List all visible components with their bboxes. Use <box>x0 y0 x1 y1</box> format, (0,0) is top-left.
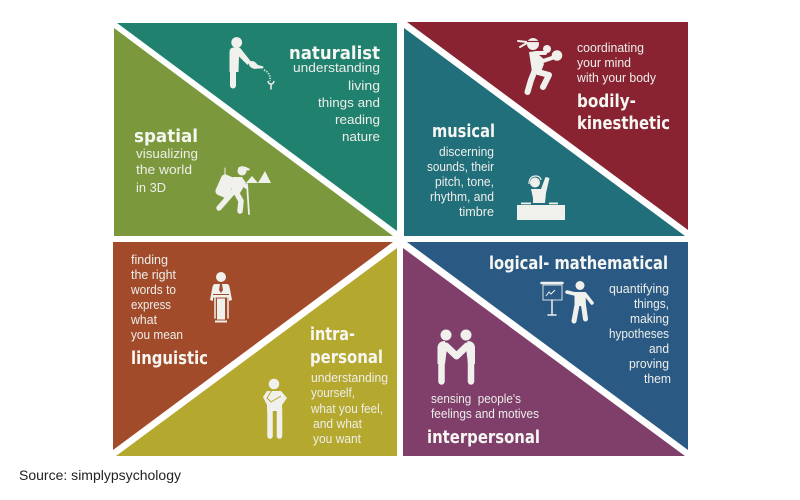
heading: linguistic: linguistic <box>131 349 208 369</box>
text: spatial description: visualizing <box>136 146 198 161</box>
text: naturalist description <box>293 60 380 144</box>
heading: logical-mathematical: logical- mathematical <box>489 254 668 274</box>
panel: bodily-kinesthetic <box>407 22 688 230</box>
text: intrapersonal description: understanding <box>311 370 388 385</box>
heading: bodily-kinesthetic: bodily- <box>577 92 636 112</box>
icon: speaker at podium <box>210 272 232 322</box>
text: linguistic description: express <box>131 297 171 312</box>
text: logical-mathematical description: proving <box>629 356 669 371</box>
heading: musical: musical <box>432 122 495 142</box>
panel: spatial <box>114 28 393 236</box>
text: interpersonal description <box>431 391 539 421</box>
heading: bodily-kinesthetic: kinesthetic <box>577 114 670 134</box>
text: musical description: timbre <box>459 204 494 219</box>
icon: two people shaking hands <box>438 330 475 382</box>
panel: linguistic <box>113 242 393 450</box>
text: linguistic description: finding <box>131 252 168 267</box>
text: logical-mathematical description: hypotheses <box>609 326 669 341</box>
text: linguistic description: words to <box>130 282 176 297</box>
source caption: Source: simplypsychology <box>19 467 181 483</box>
text: naturalist description: understanding <box>293 60 380 75</box>
icon: thinking person <box>263 379 287 436</box>
icon: DJ at turntable <box>517 176 565 220</box>
text: intrapersonal description: and what <box>313 416 362 431</box>
text: naturalist description: things and <box>318 95 380 110</box>
heading: intra-personal: personal <box>310 348 383 368</box>
text: naturalist description: living <box>348 78 380 93</box>
panel: logical-mathematical <box>407 242 688 450</box>
text: logical-mathematical description: making <box>630 311 669 326</box>
icon: hiker and mountains <box>214 166 271 214</box>
text: linguistic description: you mean <box>131 327 183 342</box>
text: logical-mathematical description: things, <box>634 296 669 311</box>
text: intrapersonal description <box>310 370 388 446</box>
text: linguistic description: the right <box>131 267 176 282</box>
text: logical-mathematical description: them <box>644 371 671 386</box>
text: bodily-kinesthetic description: coordinating <box>577 40 644 55</box>
text: intrapersonal description: what you feel, <box>310 401 383 416</box>
text: bodily-kinesthetic description <box>576 40 656 85</box>
text: naturalist description: nature <box>342 129 380 144</box>
text: musical description: sounds, their <box>427 159 495 174</box>
panel: interpersonal <box>403 248 685 456</box>
panel: intrapersonal <box>116 248 397 456</box>
heading: interpersonal: interpersonal <box>427 428 540 448</box>
text: intrapersonal description: you want <box>313 431 361 446</box>
text: logical-mathematical description: and <box>649 341 669 356</box>
text: interpersonal description: feelings and motives <box>431 406 539 421</box>
text: musical description <box>427 144 495 219</box>
icon: presenter at chart board <box>542 281 592 321</box>
panel: musical <box>404 28 685 236</box>
text: linguistic description: what <box>130 312 157 327</box>
icon: person watering plant <box>230 37 274 90</box>
text: linguistic description <box>130 252 183 342</box>
panel: naturalist <box>117 23 397 231</box>
text: bodily-kinesthetic description: with your body <box>576 70 656 85</box>
text: naturalist description: reading <box>335 112 380 127</box>
text: musical description: pitch, tone, <box>435 174 494 189</box>
text: musical description: discerning <box>439 144 494 159</box>
heading: naturalist: naturalist <box>289 44 380 64</box>
text: spatial description: the world <box>136 162 192 177</box>
text: musical description: rhythm, and <box>430 189 494 204</box>
text: logical-mathematical description: quantifying <box>609 281 669 296</box>
heading: bodily-kinesthetic <box>577 92 670 134</box>
heading: spatial: spatial <box>134 127 198 147</box>
heading: intra-personal: intra- <box>310 325 355 345</box>
text: intrapersonal description: yourself, <box>311 385 355 400</box>
text: logical-mathematical description <box>609 281 671 386</box>
text: interpersonal description: sensing people's <box>431 391 521 406</box>
icon: boxer <box>518 38 562 92</box>
text: bodily-kinesthetic description: your mind <box>577 55 631 70</box>
heading: intra-personal <box>310 325 383 368</box>
text: spatial description: in 3D <box>136 180 166 195</box>
text: spatial description <box>136 146 198 195</box>
